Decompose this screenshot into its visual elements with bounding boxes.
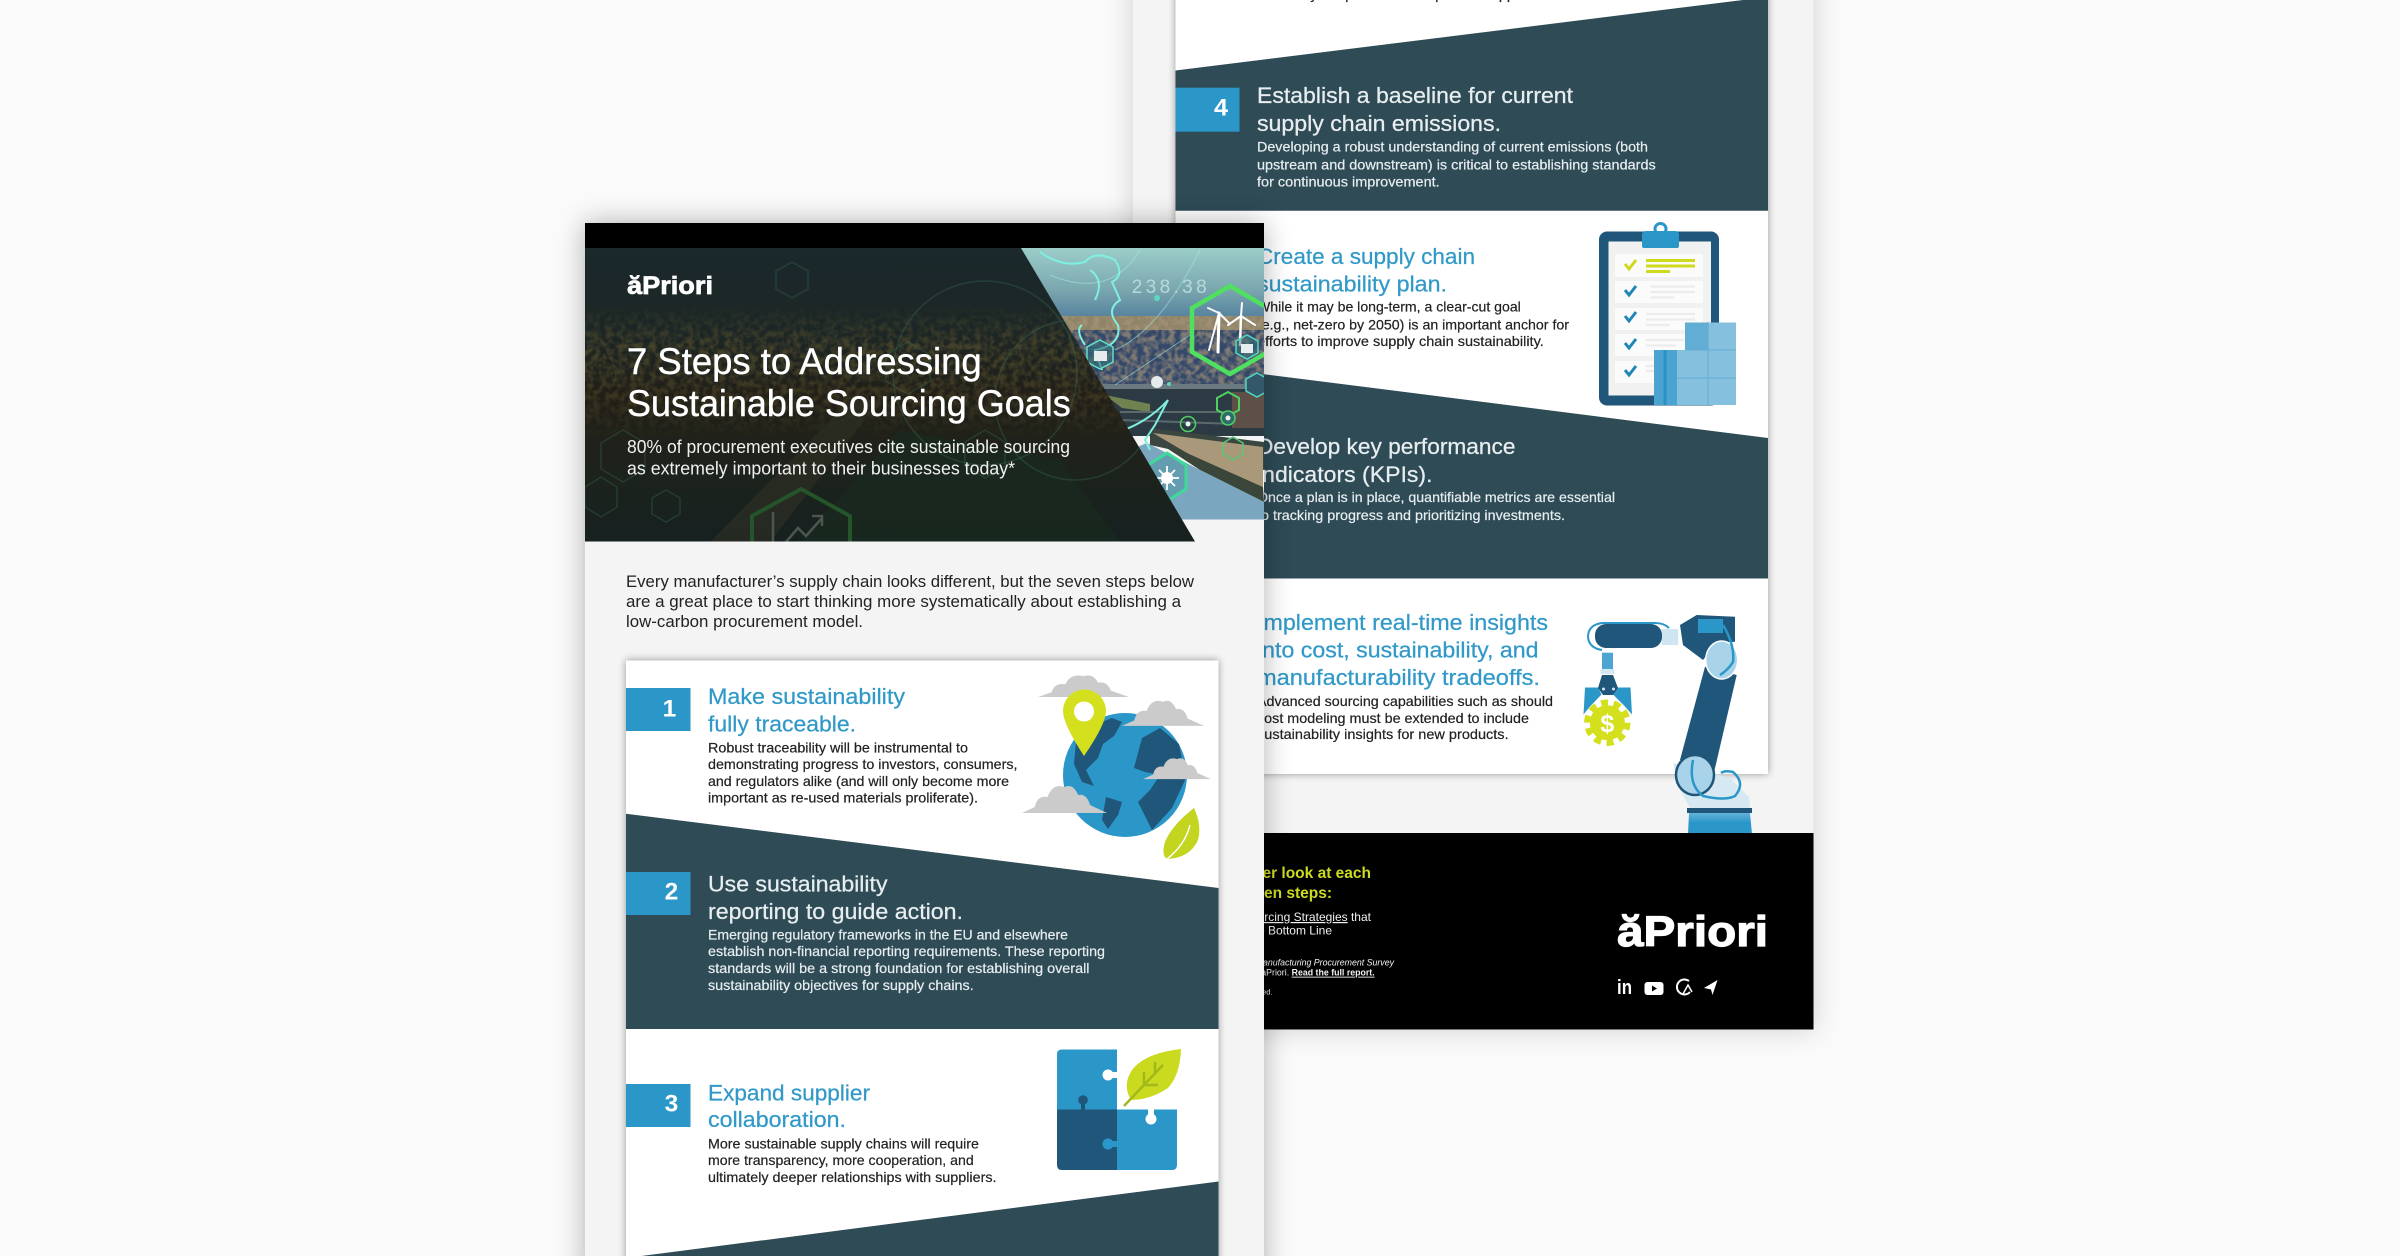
panel: footer xyxy=(1133,833,1814,1030)
icon: robot arm holding dollar gear xyxy=(1584,615,1752,834)
step 7 heading: manufacturability tradeoffs. xyxy=(1257,665,1540,690)
step 4 body: for continuous improvement. xyxy=(1257,175,1440,190)
step 3 body xyxy=(708,1136,996,1185)
step 1 body xyxy=(708,740,1018,806)
step 5 heading xyxy=(1257,244,1475,297)
step 4 number xyxy=(1176,88,1240,132)
step 3 body: ultimately deeper relationships with suppliers. xyxy=(708,1170,996,1185)
footer call to action heading: Take a closer look at each xyxy=(1180,865,1371,882)
step 2 number xyxy=(626,872,690,915)
step 7 heading xyxy=(1257,610,1548,690)
step 6 heading xyxy=(1257,434,1516,487)
subtitle xyxy=(627,436,1070,478)
step 1 heading: fully traceable. xyxy=(708,712,856,736)
step 2 heading: reporting to guide action. xyxy=(708,899,963,924)
step 4 number: 4 xyxy=(1214,95,1228,122)
step 6 heading: indicators (KPIs). xyxy=(1257,462,1432,487)
footer footnote: All rights reserved. xyxy=(1210,988,1272,997)
subtitle: as extremely important to their businesses today* xyxy=(627,458,1015,478)
step 4 body: upstream and downstream) is critical to establishing standards xyxy=(1257,157,1656,172)
step 1 body: Robust traceability will be instrumental to xyxy=(708,740,968,755)
step 5 body xyxy=(1257,300,1569,349)
step 4 band start xyxy=(626,1182,1218,1256)
step 3 heading: Expand supplier xyxy=(708,1080,871,1106)
panel: front page xyxy=(585,223,1270,1256)
step 3 body: more transparency, more cooperation, and xyxy=(708,1153,974,1168)
step 3 number: 3 xyxy=(665,1090,678,1118)
step 7 body xyxy=(1257,694,1553,742)
step 7 heading: into cost, sustainability, and xyxy=(1257,638,1538,663)
icon: globe with pin, clouds and leaf xyxy=(1022,675,1211,859)
step 2 heading xyxy=(708,872,963,924)
step 2 number: 2 xyxy=(665,878,678,905)
step 4 body xyxy=(1257,140,1656,190)
social icons xyxy=(1617,977,1718,999)
step 1 number xyxy=(626,688,690,731)
step 4 heading xyxy=(1257,83,1574,136)
subtitle: 80% of procurement executives cite sustainable sourcing xyxy=(627,436,1070,457)
step 2 body: establish non-financial reporting requirements. These reporting xyxy=(708,944,1105,959)
footer footnote: conducted by and aPriori. Read the full report. xyxy=(1189,968,1375,978)
footer link xyxy=(1214,910,1372,938)
step 2 band xyxy=(626,814,1218,1029)
step 5 heading: Create a supply chain xyxy=(1257,244,1475,269)
icon: clipboard with boxes xyxy=(1599,224,1736,406)
intro paragraph: low-carbon procurement model. xyxy=(626,612,863,631)
icon: puzzle with leaf xyxy=(1057,1049,1181,1170)
hero image right: city with sustainability icons: 238.38 xyxy=(1132,277,1207,298)
step 3 heading xyxy=(708,1080,871,1132)
step 3 body: More sustainable supply chains will require xyxy=(708,1136,979,1152)
hero dark panel xyxy=(585,248,1195,542)
step 7 body: sustainability insights for new products. xyxy=(1257,727,1509,742)
panel: back page (continuation of infographic) xyxy=(1133,0,1814,1030)
step 6 body xyxy=(1257,490,1615,523)
intro paragraph: are a great place to start thinking more systematically about establishing a xyxy=(626,592,1182,611)
apriori logo: ăPriori xyxy=(627,272,713,300)
step 4 heading: supply chain emissions. xyxy=(1257,111,1501,136)
step 5 body: While it may be long-term, a clear-cut goal xyxy=(1257,300,1521,315)
step 3 heading: collaboration. xyxy=(708,1107,846,1132)
step 4 heading: Establish a baseline for current xyxy=(1257,83,1574,108)
step 2 body: standards will be a strong foundation for establishing overall xyxy=(708,961,1090,976)
panel: back steps card xyxy=(1176,0,1768,774)
title: Sustainable Sourcing Goals xyxy=(627,383,1071,424)
footer link: Sourcing Strategies that xyxy=(1243,910,1372,924)
step 6 body: to tracking progress and prioritizing investments. xyxy=(1257,508,1565,523)
step 7 body: Advanced sourcing capabilities such as should xyxy=(1257,694,1553,709)
step 1 heading: Make sustainability xyxy=(708,684,906,709)
step 2 body: Emerging regulatory frameworks in the EU and elsewhere xyxy=(708,927,1068,942)
step 2 body: sustainability objectives for supply chains. xyxy=(708,978,974,993)
step 4 band xyxy=(1176,0,1768,211)
step 1 heading xyxy=(708,684,906,736)
step 1 body: demonstrating progress to investors, consumers, xyxy=(708,757,1018,772)
step 1 body: and regulators alike (and will only become more xyxy=(708,774,1009,789)
footer footnote: 2022 Manufacturing Procurement Survey xyxy=(1233,958,1395,968)
intro paragraph xyxy=(626,572,1195,631)
step 5 heading: sustainability plan. xyxy=(1257,272,1447,297)
title: 7 Steps to Addressing xyxy=(627,341,982,382)
footer call to action heading xyxy=(1180,865,1371,902)
step 5 body: efforts to improve supply chain sustainability. xyxy=(1257,334,1544,349)
step 2 body xyxy=(708,927,1105,993)
step 4 body: Developing a robust understanding of current emissions (both xyxy=(1257,140,1648,155)
step 1 number: 1 xyxy=(663,696,676,723)
step 7 body: cost modeling must be extended to include xyxy=(1257,711,1529,726)
intro paragraph: Every manufacturer’s supply chain looks different, but the seven steps below xyxy=(626,572,1195,591)
footer logo: ăPriori xyxy=(1617,908,1768,956)
step 7 heading: Implement real-time insights xyxy=(1257,610,1548,635)
step 6 body: Once a plan is in place, quantifiable metrics are essential xyxy=(1257,490,1615,505)
footer footnote xyxy=(1189,958,1395,997)
footer call to action heading: of the seven steps: xyxy=(1192,885,1332,902)
social icons: in xyxy=(1617,977,1632,999)
icon: robot arm holding dollar gear: $ xyxy=(1600,710,1614,738)
step 6 band xyxy=(1176,363,1768,578)
step 2 heading: Use sustainability xyxy=(708,872,888,896)
step 3 number xyxy=(626,1084,690,1127)
hero image right: city with sustainability icons xyxy=(1020,248,1270,520)
step 1 body: important as re-used materials proliferate). xyxy=(708,791,978,806)
title xyxy=(627,341,1071,424)
step 5 body: (e.g., net-zero by 2050) is an important anchor for xyxy=(1257,317,1569,332)
footer link: Boost the Bottom Line xyxy=(1214,924,1332,938)
panel: front steps card xyxy=(626,660,1218,1256)
step 6 heading: Develop key performance xyxy=(1257,434,1516,459)
